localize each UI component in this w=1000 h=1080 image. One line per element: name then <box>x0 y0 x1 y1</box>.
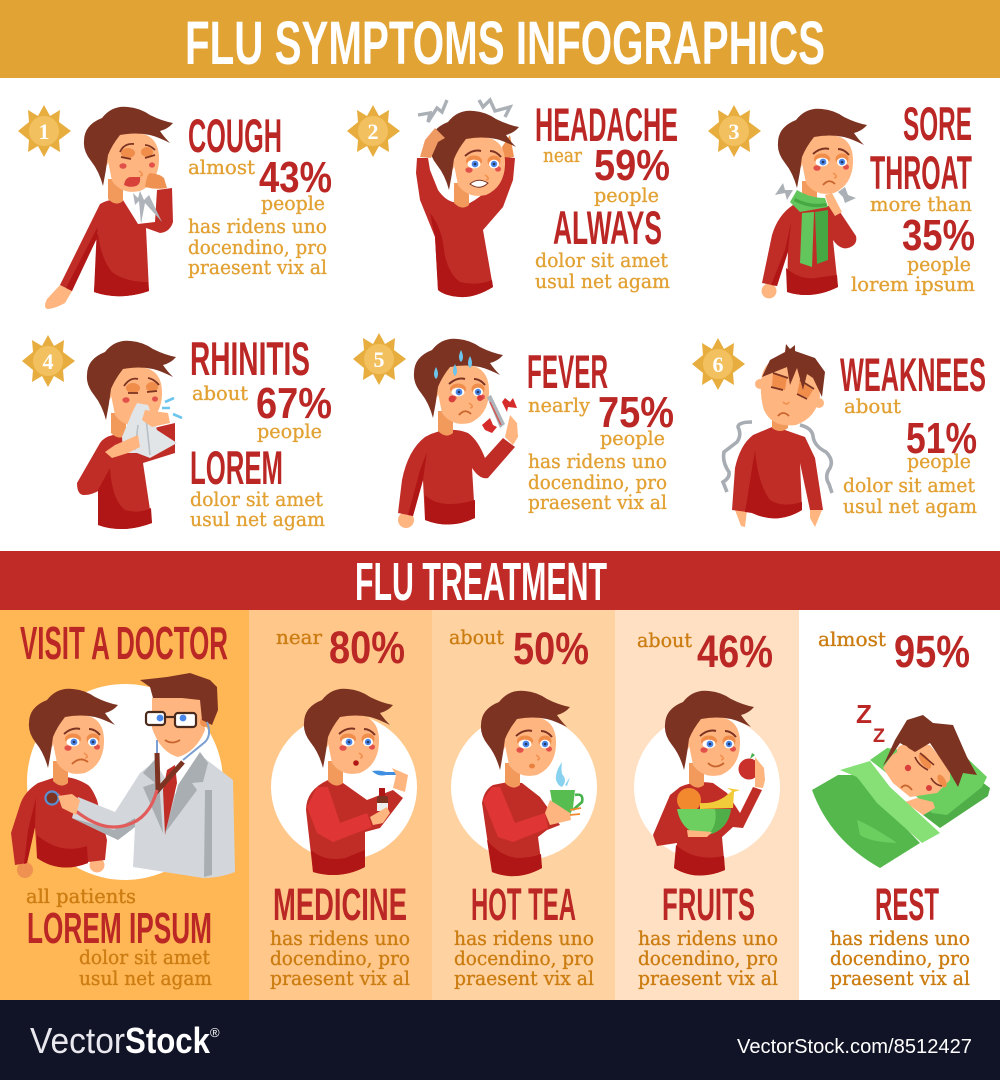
title banner <box>0 0 1000 78</box>
panel: hot tea: praesent vix al <box>454 966 594 990</box>
panel: rhinitis: usul net agam <box>190 507 325 531</box>
footer bar <box>0 1000 1000 1080</box>
panel: medicine <box>249 610 432 1000</box>
badge 1 <box>18 105 71 157</box>
heading: HEADACHE <box>535 98 678 151</box>
panel: fruits: docendino, pro <box>638 946 778 970</box>
badge 4: 4 <box>42 349 54 374</box>
heading: RHINITIS <box>190 332 310 385</box>
panel: rhinitis <box>22 332 332 531</box>
heading: REST <box>875 879 939 930</box>
heading: FEVER <box>527 345 608 398</box>
stat: near <box>543 143 582 167</box>
panel: fruits: praesent vix al <box>638 966 778 990</box>
panel: fever: docendino, pro <box>528 470 667 494</box>
panel: sore throat: people <box>907 252 971 276</box>
badge 5: 5 <box>374 347 384 372</box>
heading: COUGH <box>188 109 282 162</box>
footer logo <box>30 1020 220 1061</box>
subheading: LOREM IPSUM <box>27 904 212 953</box>
character: boy with thermometer <box>398 339 518 528</box>
character: boy with headache <box>416 100 519 297</box>
panel: cough: people <box>261 191 325 215</box>
heading: VISIT A DOCTOR <box>20 617 228 669</box>
badge 3 <box>708 105 761 157</box>
stat: nearly <box>528 393 591 417</box>
panel: medicine: docendino, pro <box>270 946 410 970</box>
badge 4 <box>22 335 75 387</box>
heading: HOT TEA <box>471 879 576 930</box>
badge 2 <box>347 105 400 157</box>
body text: lorem ipsum <box>851 272 975 296</box>
character: tired boy <box>723 344 832 527</box>
body text: has ridens uno <box>528 449 667 473</box>
footer logo: Stock <box>125 1020 211 1061</box>
icon: sleeping letters: Z <box>856 699 872 729</box>
panel: cough: 43% <box>259 153 332 202</box>
panel: cough: praesent vix al <box>188 255 327 279</box>
stat: about <box>637 628 692 652</box>
character: boy sneezing <box>77 341 182 529</box>
panel: weakness: 51% <box>906 414 977 463</box>
character: boy with fruit bowl <box>653 691 765 876</box>
panel: visit a doctor <box>0 610 249 1000</box>
stat: near <box>276 625 322 649</box>
panel: rhinitis: people <box>257 419 322 443</box>
body text: dolor sit amet <box>535 248 668 272</box>
illustration: boy sleeping in bed <box>812 715 990 868</box>
body text: has ridens uno <box>638 926 778 950</box>
panel: headache: people <box>594 183 659 207</box>
panel: headache: 59% <box>594 141 670 190</box>
heading: FRUITS <box>662 879 755 930</box>
panel: fever <box>353 333 674 528</box>
body text: has ridens uno <box>830 926 970 950</box>
panel: visit a doctor: usul net agam <box>79 966 212 990</box>
character: boy with scarf <box>762 109 867 298</box>
body text: has ridens uno <box>188 214 327 238</box>
heading: MEDICINE <box>273 879 407 930</box>
panel: rhinitis: 67% <box>256 379 332 428</box>
stat: more than <box>870 192 972 216</box>
badge 6: 6 <box>712 352 724 377</box>
character: boy with tea <box>481 691 582 876</box>
panel: rest <box>799 610 1000 1000</box>
treatment banner <box>0 551 1000 612</box>
subheading: ALWAYS <box>553 201 662 254</box>
panel: hot tea: docendino, pro <box>454 946 594 970</box>
panel: hot tea: 50% <box>513 623 589 674</box>
badge 5 <box>353 333 406 385</box>
panel: rest: 95% <box>894 626 970 677</box>
panel: medicine: praesent vix al <box>270 966 410 990</box>
stat: almost <box>818 627 886 651</box>
badge 6 <box>692 338 745 390</box>
stat: about <box>449 625 504 649</box>
panel: fever: 75% <box>598 388 674 437</box>
illustration: doctor examining boy <box>11 673 235 878</box>
panel: fever: people <box>600 426 665 450</box>
panel: fruits: 46% <box>697 626 773 677</box>
badge 3: 3 <box>728 119 740 144</box>
panel: headache: usul net agam <box>535 269 670 293</box>
icon: sleeping letters: Z <box>873 726 885 747</box>
panel: weakness: usul net agam <box>843 494 977 518</box>
subheading: LOREM <box>190 441 283 494</box>
panel: medicine: 80% <box>329 622 405 673</box>
panel: headache <box>347 98 678 297</box>
body text: dolor sit amet <box>79 945 210 969</box>
body text: has ridens uno <box>270 926 410 950</box>
panel: rest: praesent vix al <box>830 966 970 990</box>
treatment heading: FLU TREATMENT <box>355 552 607 612</box>
stat: all patients <box>26 884 136 908</box>
panel: weakness: people <box>907 449 971 473</box>
stat: about <box>844 394 901 418</box>
badge 2: 2 <box>368 119 378 144</box>
footer logo: ® <box>210 1025 220 1040</box>
panel: weakness <box>692 338 986 527</box>
character: coughing boy <box>45 107 173 309</box>
panel: fever: praesent vix al <box>528 490 667 514</box>
body text: dolor sit amet <box>190 487 323 511</box>
stat: almost <box>188 155 255 179</box>
footer url: VectorStock.com/8512427 <box>737 1036 972 1058</box>
panel: sore throat: 35% <box>902 211 975 260</box>
panel: rest: docendino, pro <box>830 946 970 970</box>
panel: cough: docendino, pro <box>188 235 327 259</box>
icon: sleeping letters <box>856 699 885 747</box>
stat: about <box>192 381 248 405</box>
panel: cough <box>18 105 332 309</box>
character: boy taking medicine <box>304 689 408 875</box>
panel: hot tea <box>432 610 615 1000</box>
panel: sore throat <box>708 97 975 298</box>
body text: has ridens uno <box>454 926 594 950</box>
body text: dolor sit amet <box>843 473 975 497</box>
panel: fruits <box>615 610 799 1000</box>
footer logo: Vector <box>30 1020 125 1061</box>
badge 1: 1 <box>38 119 50 144</box>
